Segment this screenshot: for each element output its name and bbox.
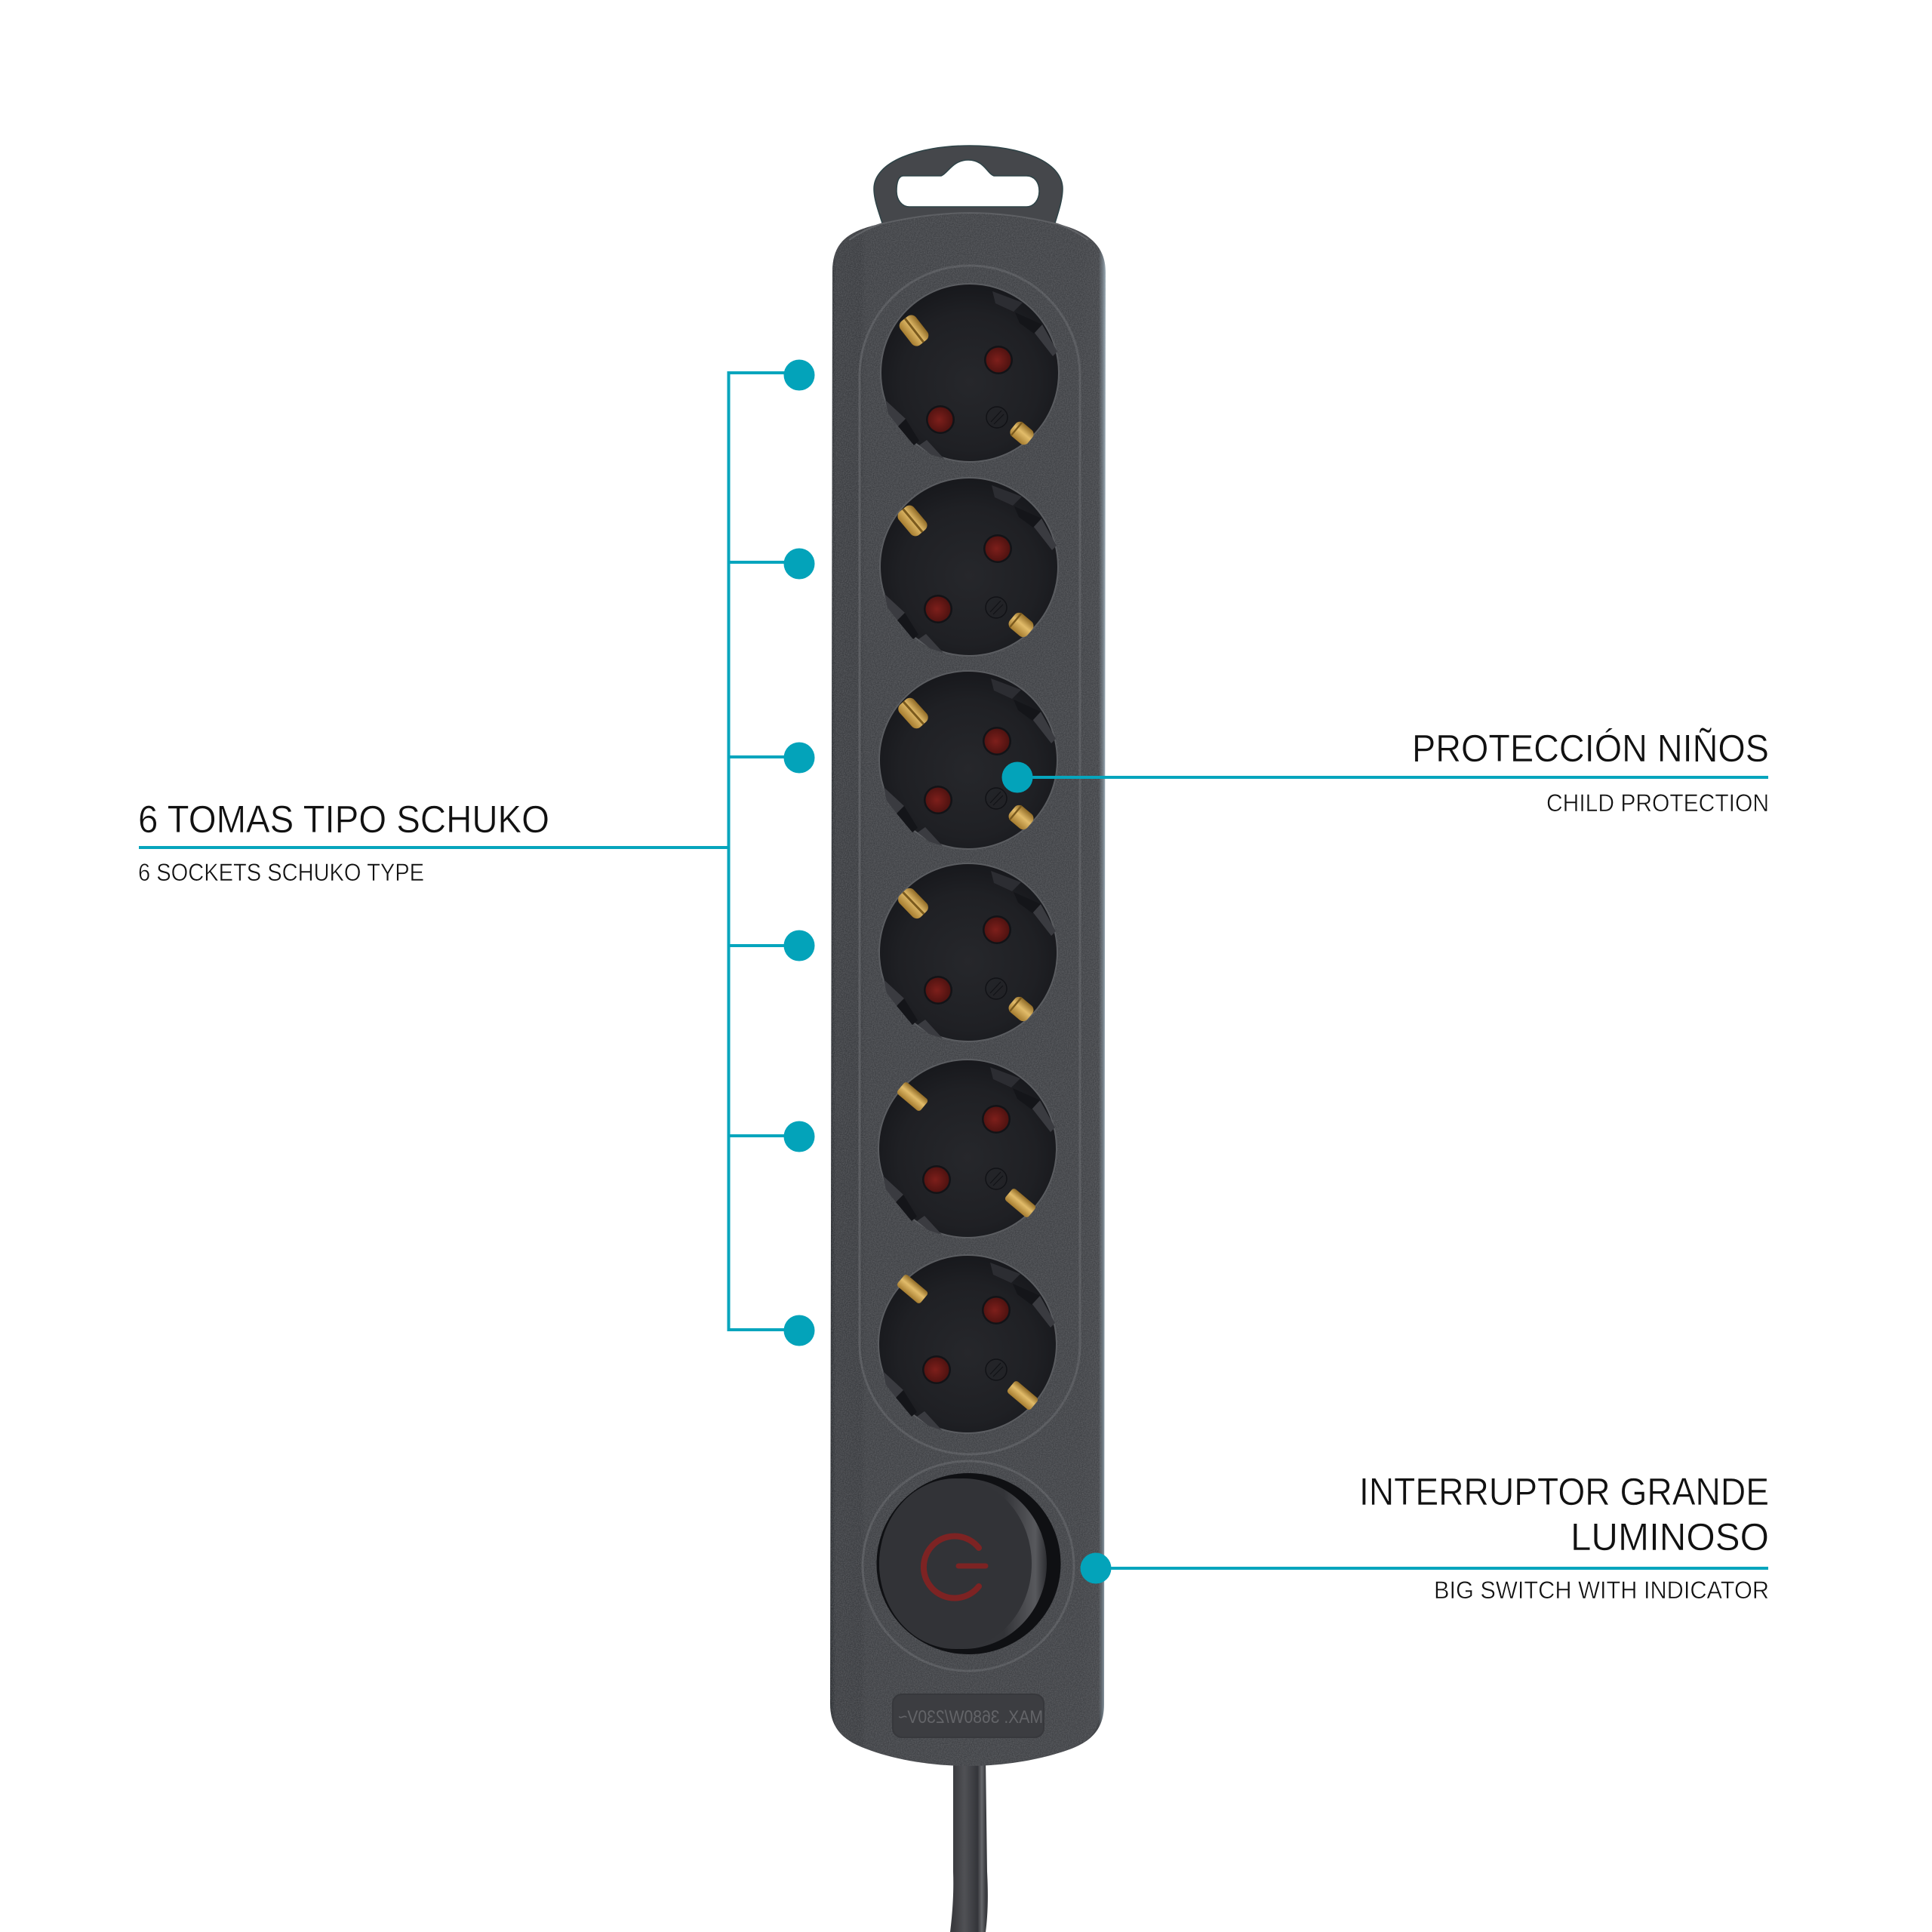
leader line xyxy=(1018,776,1768,779)
socket bezel xyxy=(860,266,1080,1454)
marker dot xyxy=(1081,1553,1111,1583)
socket 3 xyxy=(879,671,1057,849)
power cord xyxy=(950,1758,988,1932)
body grain texture xyxy=(830,213,1106,1766)
icon: power symbol xyxy=(924,1536,986,1598)
rating plate: MAX. 3680W/230V~ xyxy=(898,1707,1043,1727)
socket 6 xyxy=(878,1255,1057,1433)
socket 5 xyxy=(878,1060,1057,1238)
subtitle: big switch: BIG SWITCH WITH INDICATOR xyxy=(1434,1577,1769,1604)
heading: proteccion: PROTECCIÓN NIÑOS xyxy=(1412,727,1769,770)
marker dot xyxy=(1002,762,1032,792)
body top edge xyxy=(849,213,1088,240)
subtitle: 6 sockets: 6 SOCKETS SCHUKO TYPE xyxy=(138,859,424,886)
marker dots xyxy=(783,359,815,1346)
heading: luminoso: LUMINOSO xyxy=(1571,1515,1769,1558)
callout: 6 sockets bracket xyxy=(138,359,815,1346)
bracket lines xyxy=(139,373,799,1330)
subtitle: child protection: CHILD PROTECTION xyxy=(1546,789,1769,817)
callout: child protection xyxy=(1002,727,1769,817)
socket 2 xyxy=(880,478,1058,656)
rating plate xyxy=(893,1694,1044,1737)
leader line xyxy=(1096,1567,1768,1570)
switch bezel ring xyxy=(863,1461,1074,1671)
rocker switch xyxy=(877,1473,1061,1654)
power strip product xyxy=(830,146,1106,1932)
socket 1 xyxy=(881,284,1059,462)
strip body xyxy=(830,213,1106,1766)
socket 4 xyxy=(879,863,1057,1041)
callout: big switch xyxy=(1081,1470,1769,1604)
heading: 6 tomas: 6 TOMAS TIPO SCHUKO xyxy=(138,798,549,841)
heading: interruptor: INTERRUPTOR GRANDE xyxy=(1359,1470,1769,1513)
hanging handle xyxy=(874,146,1063,230)
